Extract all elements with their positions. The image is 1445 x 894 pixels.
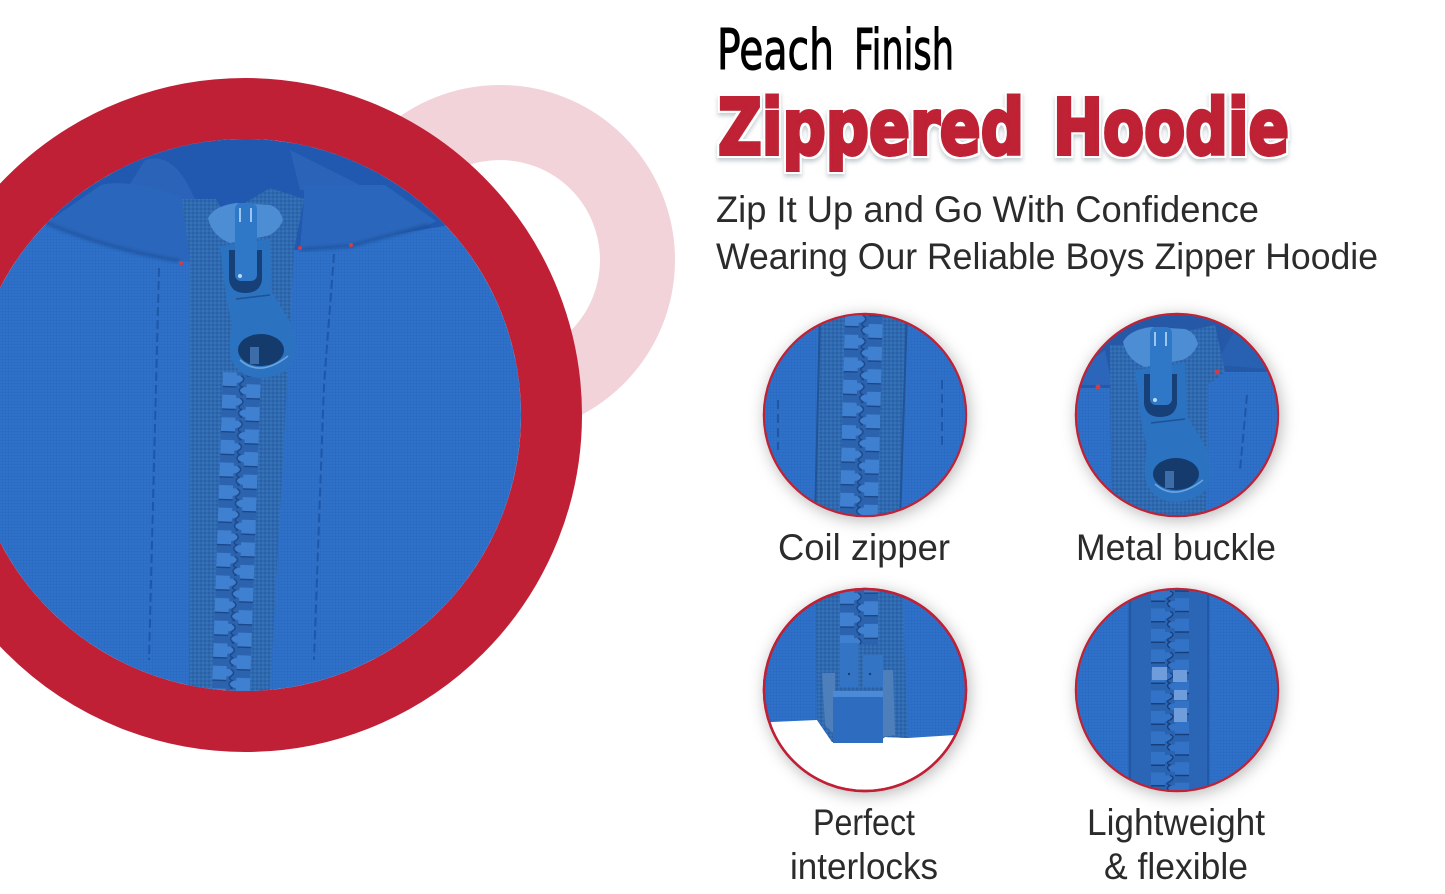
title line: Peach Finish: Peach [717, 18, 834, 83]
icon: lightweight zipper photo [1070, 585, 1290, 795]
collar left [46, 183, 190, 262]
feature: lightweight and flexible [1070, 585, 1290, 887]
icon: interlocks photo [755, 585, 975, 791]
main zipper photo circle [0, 108, 552, 722]
icon: metal buckle photo [1070, 310, 1290, 530]
title [717, 18, 1289, 173]
title line: Peach Finish: Finish [854, 18, 954, 83]
label: Lightweight [1087, 802, 1266, 843]
zipper tape [182, 188, 304, 692]
label: Coil zipper [778, 527, 950, 568]
subtitle text block [716, 189, 1378, 277]
subtitle text block: Zip It Up and Go With Confidence [716, 189, 1259, 230]
hoodie close-up [0, 130, 530, 700]
title line: Zippered Hoodie: Zippered [718, 84, 1024, 173]
label [790, 802, 938, 887]
feature: metal buckle [1070, 310, 1290, 568]
label: & flexible [1104, 846, 1248, 887]
feature: coil zipper [760, 310, 975, 568]
label: Metal buckle [1076, 527, 1276, 568]
collar right [300, 185, 436, 250]
label: interlocks [790, 846, 938, 887]
icon: coil zipper photo [760, 310, 975, 525]
title line: Zippered Hoodie [718, 84, 1289, 173]
subtitle text block: Wearing Our Reliable Boys Zipper Hoodie [716, 236, 1378, 277]
seams [149, 254, 334, 660]
hood lining [52, 139, 446, 250]
decorative pink ring [362, 122, 638, 398]
zipper slider [208, 203, 297, 378]
teeth [212, 372, 261, 698]
label [1087, 802, 1266, 887]
label: Perfect [813, 802, 916, 843]
feature: perfect interlocks [755, 585, 975, 887]
title line: Zippered Hoodie: Hoodie [1053, 84, 1289, 173]
red ring [0, 108, 552, 722]
